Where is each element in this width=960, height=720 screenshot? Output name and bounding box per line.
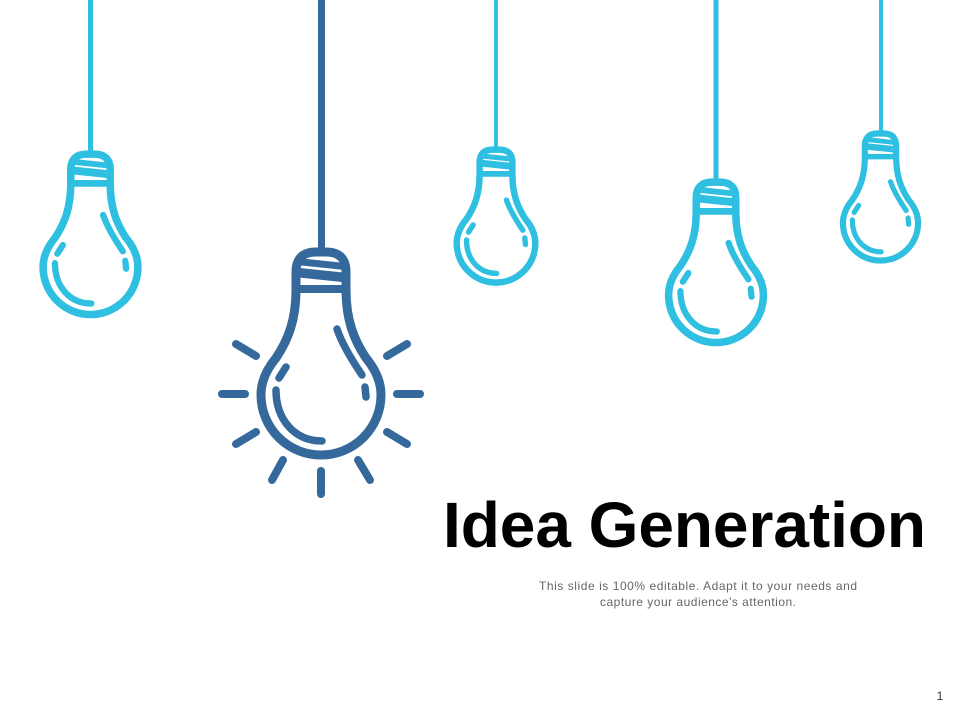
light bulb 4 <box>669 0 763 343</box>
light bulb 3 <box>457 0 535 283</box>
description: capture your audience's attention. <box>600 595 796 609</box>
description <box>539 579 857 609</box>
page number: 1 <box>937 689 944 703</box>
light bulb 1 <box>43 0 138 315</box>
light bulb 5 <box>843 0 918 261</box>
light rays <box>222 344 420 494</box>
main bulb cord <box>318 0 325 250</box>
title: Idea Generation <box>443 489 926 561</box>
main lit bulb <box>222 0 420 494</box>
main bulb outline <box>261 252 381 455</box>
description: This slide is 100% editable. Adapt it to your needs and <box>539 579 857 593</box>
